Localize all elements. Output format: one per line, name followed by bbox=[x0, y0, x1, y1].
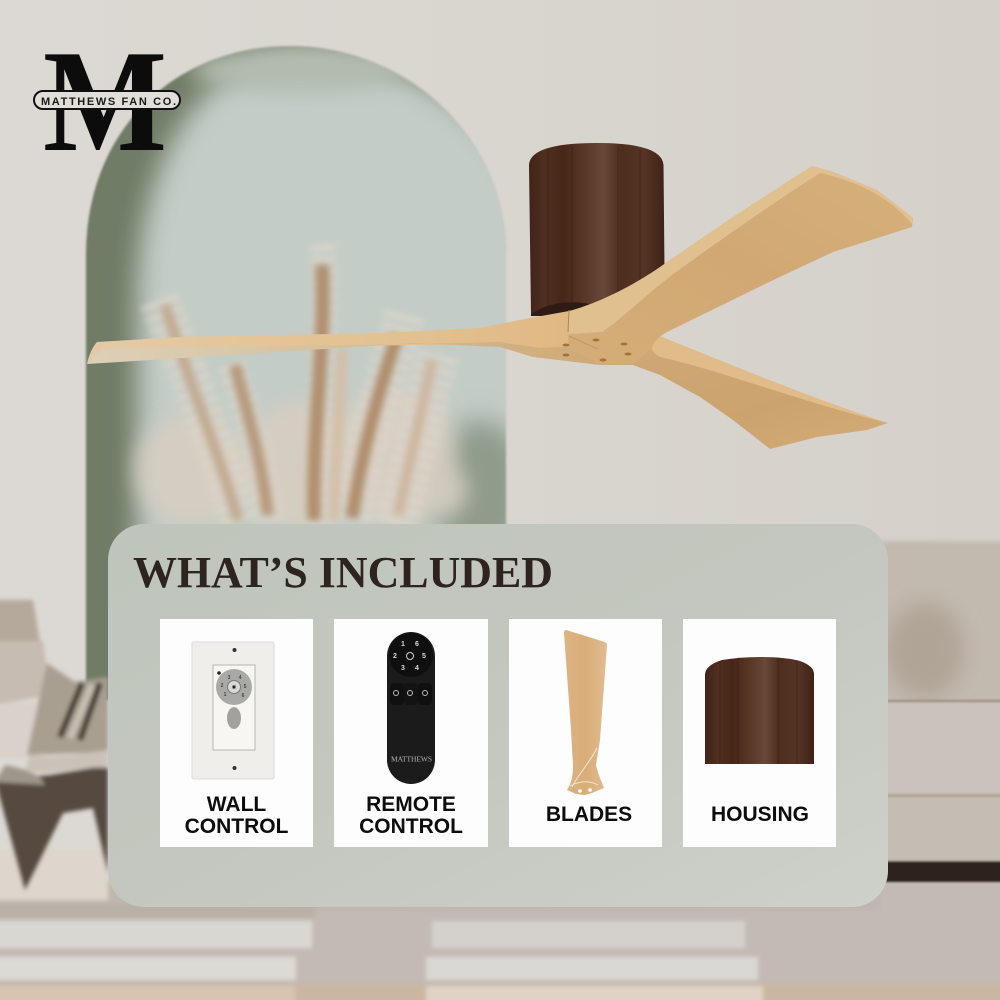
icon: wall control: 1 bbox=[224, 692, 227, 698]
ceiling fan bbox=[87, 143, 913, 449]
label: CONTROL bbox=[359, 815, 463, 838]
card: blades bbox=[509, 619, 662, 847]
logo monogram M: M bbox=[43, 20, 167, 182]
icon: wall control: 2 bbox=[221, 683, 224, 689]
logo bbox=[34, 20, 180, 182]
icon: remote control: 3 bbox=[401, 665, 405, 672]
fan housing bbox=[529, 143, 664, 316]
label: WALL bbox=[207, 793, 266, 816]
upper right blade bbox=[568, 166, 913, 365]
logo name pill: MATTHEWS FAN CO. bbox=[41, 96, 176, 108]
blade mounting screws bbox=[562, 338, 632, 362]
icon: remote control: 5 bbox=[422, 653, 426, 660]
card: remote control bbox=[334, 619, 488, 847]
icon: blade bbox=[564, 630, 607, 795]
icon: remote control: 2 bbox=[393, 653, 397, 660]
panel background bbox=[108, 524, 888, 907]
label: REMOTE bbox=[366, 793, 456, 816]
icon: housing bbox=[705, 657, 814, 764]
icon: remote control: MATTHEWS bbox=[391, 754, 432, 764]
icon: wall control bbox=[192, 642, 274, 779]
label: BLADES bbox=[546, 803, 632, 826]
icon: remote control bbox=[387, 632, 435, 784]
right sofa bbox=[880, 541, 1000, 882]
green arch niche bbox=[85, 45, 540, 720]
panel: what's included bbox=[108, 524, 888, 907]
pampas grass bbox=[135, 245, 468, 530]
left sofa with throw bbox=[0, 600, 108, 890]
icon: wall control: 5 bbox=[244, 684, 247, 690]
label: HOUSING bbox=[711, 803, 809, 826]
label: CONTROL bbox=[185, 815, 289, 838]
floor and rug bbox=[0, 850, 1000, 1000]
icon: remote control: 6 bbox=[415, 641, 419, 648]
left blade bbox=[87, 311, 633, 365]
card: wall control bbox=[160, 619, 313, 847]
icon: wall control: 4 bbox=[239, 675, 242, 681]
icon: remote control: 1 bbox=[401, 641, 405, 648]
icon: wall control: 3 bbox=[228, 675, 231, 681]
logo name pill bbox=[34, 91, 180, 109]
lower right blade bbox=[600, 335, 888, 449]
icon: wall control: 6 bbox=[242, 693, 245, 699]
card: housing bbox=[683, 619, 836, 847]
heading: WHAT’S INCLUDED bbox=[133, 548, 553, 597]
icon: remote control: 4 bbox=[415, 665, 419, 672]
